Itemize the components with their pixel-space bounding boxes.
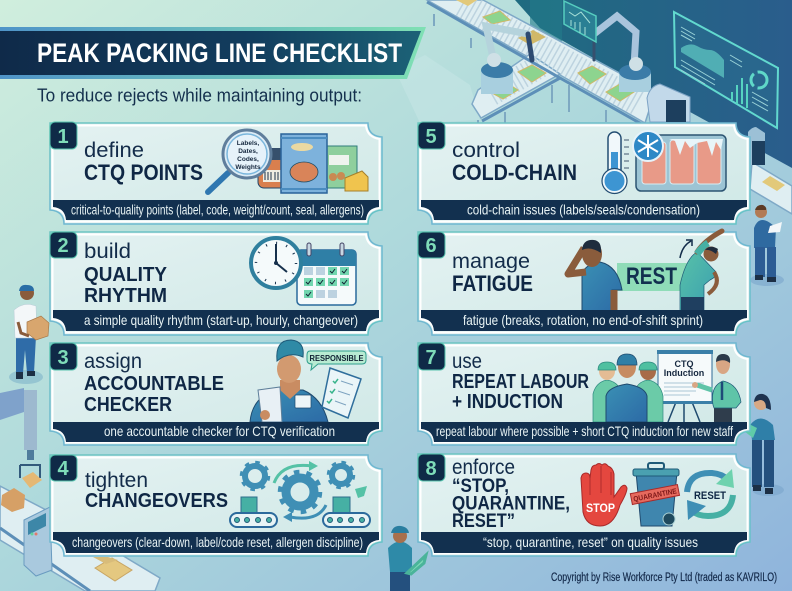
panel: 1 define CTQ points <box>50 122 382 224</box>
caption: one accountable checker for CTQ verification <box>104 423 335 439</box>
heading: define <box>84 138 144 162</box>
worker: top right with clipboard <box>750 205 784 286</box>
badge <box>418 232 445 258</box>
worker: left with box <box>9 285 49 384</box>
badge: 2 <box>57 235 69 257</box>
caption: critical-to-quality points (label, code, weight/count, seal, allergens) <box>71 202 364 218</box>
heading: “STOP, <box>452 476 509 497</box>
heading: REPEAT LABOUR <box>452 370 589 393</box>
subtitle: To reduce rejects while maintaining output: <box>37 84 362 106</box>
caption: fatigue (breaks, rotation, no end-of-shift sprint) <box>463 312 703 328</box>
heading: manage <box>452 249 530 273</box>
badge: 6 <box>425 235 437 257</box>
icon: reset arrows: RESET <box>694 490 726 502</box>
badge <box>50 122 77 149</box>
icon: checker with clipboard <box>250 340 366 422</box>
icon: stop hand: STOP <box>586 501 615 515</box>
badge <box>50 455 77 481</box>
icon: thermometer and frozen tray <box>602 131 726 194</box>
icon: magnifier and food packs: Labels, <box>237 140 259 147</box>
icon: team and induction flip chart: CTQ <box>674 359 694 369</box>
heading <box>452 249 533 296</box>
conveyor belts <box>427 0 792 214</box>
heading: COLD-CHAIN <box>452 160 577 185</box>
heading: + INDUCTION <box>452 390 563 413</box>
icon: magnifier and food packs: Weights <box>235 164 261 171</box>
badge <box>50 232 77 258</box>
dashboard screen <box>674 12 778 128</box>
icon: tired worker, rest sign and stretching worker <box>568 231 722 311</box>
icon: stop hand <box>581 464 627 526</box>
heading: QUALITY <box>84 263 167 286</box>
panel: 3 assign accountable checker <box>50 340 382 445</box>
factory scene: top right <box>395 0 792 214</box>
heading: tighten <box>85 468 148 492</box>
icon: gears and conveyors <box>230 461 370 527</box>
heading: control <box>452 138 520 162</box>
icon: tired worker, rest sign and stretching worker: REST <box>626 263 677 290</box>
heading: CHANGEOVERS <box>85 489 228 512</box>
badge <box>50 343 77 370</box>
heading <box>452 138 577 185</box>
panel: 4 tighten changeovers <box>50 455 382 556</box>
panel: 5 control cold-chain <box>418 122 750 224</box>
icon: magnifier and food packs: Dates, <box>238 148 258 155</box>
icon: reset arrows <box>687 469 734 520</box>
badge: 5 <box>425 126 437 148</box>
panel: 7 use repeat labour and induction <box>418 343 750 445</box>
badge: 7 <box>425 347 437 369</box>
caption: “stop, quarantine, reset” on quality issues <box>483 534 698 550</box>
badge: 1 <box>57 126 69 148</box>
icon: magnifier and food packs: Codes, <box>237 156 259 163</box>
factory scene: bottom left <box>0 388 160 591</box>
worker: lower right with tablet <box>744 394 784 496</box>
caption: cold-chain issues (labels/seals/condensation) <box>467 202 700 218</box>
panel: 6 manage fatigue <box>418 231 750 335</box>
icon: quarantine bin <box>630 463 680 526</box>
badge <box>418 343 445 370</box>
heading <box>84 349 224 416</box>
scanner arches <box>647 84 765 165</box>
robot arm left <box>481 26 532 94</box>
heading: ACCOUNTABLE <box>84 372 224 395</box>
title: PEAK PACKING LINE CHECKLIST <box>37 38 402 68</box>
caption: a simple quality rhythm (start-up, hourly, changeover) <box>84 312 358 328</box>
worker: bottom centre with tablet <box>388 526 426 591</box>
heading <box>84 239 167 307</box>
icon: checker with clipboard: RESPONSIBLE <box>310 354 364 363</box>
icon: clock and calendar <box>251 238 356 305</box>
icon: team and induction flip chart <box>593 350 741 422</box>
badge <box>418 122 445 149</box>
panel: 8 enforce stop quarantine reset <box>418 454 750 556</box>
heading: FATIGUE <box>452 271 533 296</box>
heading: build <box>84 239 131 263</box>
badge: 4 <box>57 458 69 480</box>
title banner <box>0 27 426 79</box>
heading: QUARANTINE, <box>452 494 570 514</box>
robot arm right <box>594 16 651 92</box>
badge <box>418 454 445 481</box>
badge: 3 <box>57 347 69 369</box>
icon: magnifier and food packs <box>208 130 368 193</box>
heading: RESET” <box>452 511 515 532</box>
badge: 8 <box>425 458 437 480</box>
heading <box>84 138 203 185</box>
small wall screen <box>564 1 596 42</box>
heading: RHYTHM <box>84 284 167 307</box>
panel: 2 build quality rhythm <box>50 232 382 335</box>
heading: CHECKER <box>84 393 172 416</box>
heading: assign <box>84 349 142 373</box>
icon: quarantine bin: QUARANTINE <box>633 486 677 504</box>
heading: use <box>452 349 482 373</box>
caption: changeovers (clear-down, label/code reset, allergen discipline) <box>72 534 363 550</box>
icon: team and induction flip chart: Induction <box>664 368 704 378</box>
heading <box>452 349 589 413</box>
heading: enforce <box>452 455 515 479</box>
heading: CTQ POINTS <box>84 160 203 185</box>
heading <box>85 468 228 512</box>
heading <box>452 455 570 532</box>
